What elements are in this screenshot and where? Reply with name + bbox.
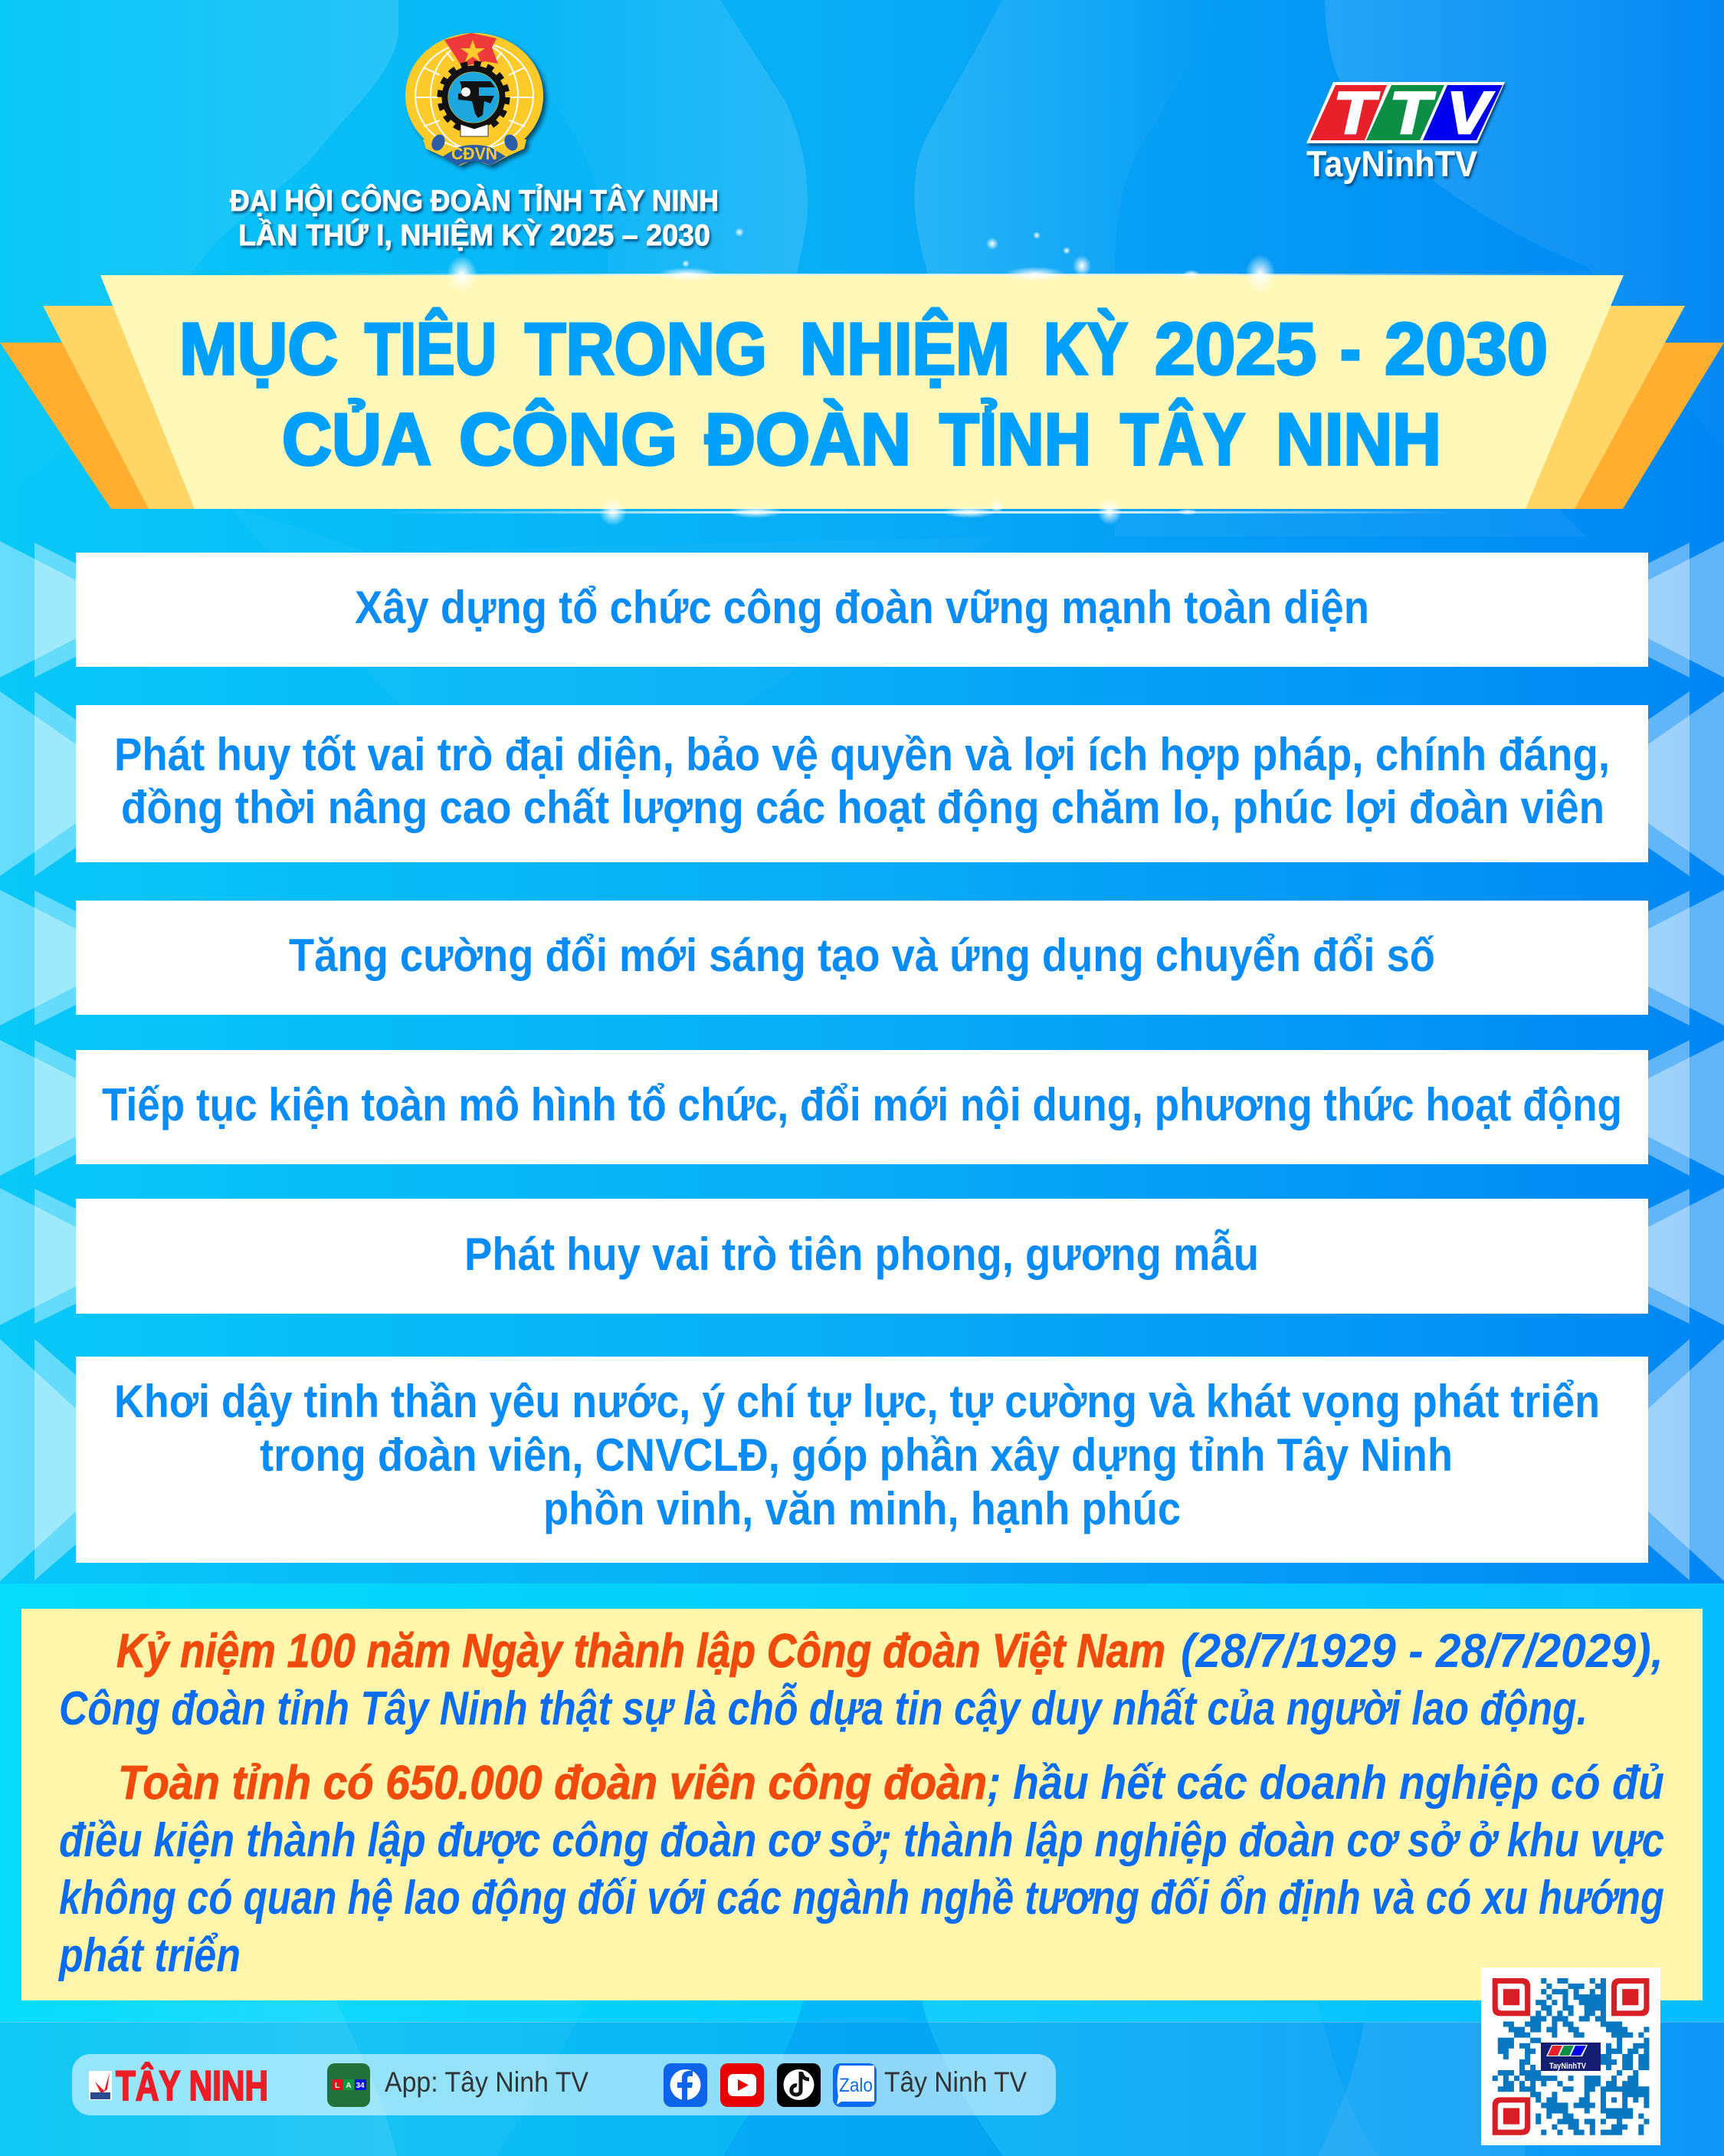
left side chevron panels xyxy=(0,541,76,1581)
goal 1 xyxy=(76,553,1648,667)
icon: app: 34 xyxy=(356,2082,365,2090)
banner title text: TÂY xyxy=(1120,398,1245,481)
goal 6: Khơi dậy tinh thần yêu nước, ý chí tự lực, tự cường và khát vọng phát triển xyxy=(114,1376,1600,1427)
banner title text: CÔNG xyxy=(459,398,677,481)
heading: congress name: ĐẠI HỘI CÔNG ĐOÀN TỈNH TÂY NINH xyxy=(230,183,719,218)
banner title text: 2025 xyxy=(1155,308,1316,390)
icon: TTV logo: T xyxy=(1333,79,1380,146)
title banner xyxy=(0,275,1724,509)
QR centre logo: TayNinhTV xyxy=(1549,2062,1587,2071)
icon: Tây Ninh newspaper logo: TÂY NINH xyxy=(116,2062,268,2109)
icon: Tây Ninh newspaper logo xyxy=(89,2062,268,2109)
icon: app xyxy=(327,2063,370,2107)
goal 5: Phát huy vai trò tiên phong, gương mẫu xyxy=(464,1229,1259,1280)
icon: facebook xyxy=(664,2063,707,2107)
banner title text xyxy=(179,307,1548,481)
QR code xyxy=(1481,1967,1660,2145)
sparkles on banner edges xyxy=(230,228,1609,526)
banner title text: TIÊU xyxy=(365,307,497,390)
icon: TTV logo: TayNinhTV xyxy=(1306,143,1478,184)
icon: app: L xyxy=(335,2082,339,2090)
QR centre logo xyxy=(1541,2043,1601,2071)
icon: TTV logo xyxy=(1306,79,1505,184)
goal 5 xyxy=(76,1199,1648,1314)
goal 6 xyxy=(76,1357,1648,1563)
heading: congress name xyxy=(230,183,719,252)
banner title text: KỲ xyxy=(1044,308,1128,390)
panel: commemoration text: phát triển xyxy=(57,1929,241,1982)
banner title text: NHIỆM xyxy=(800,307,1010,390)
icon: TTV logo: T xyxy=(1389,79,1436,146)
icon: trade union emblem: CĐVN xyxy=(451,144,497,163)
banner title text: MỤC xyxy=(179,308,338,390)
banner title text: - xyxy=(1340,308,1361,390)
background xyxy=(0,0,1724,1583)
goal 2: Phát huy tốt vai trò đại diện, bảo vệ quyền và lợi ích hợp pháp, chính đáng, xyxy=(114,729,1610,780)
goal 3 xyxy=(76,901,1648,1015)
flag xyxy=(444,33,498,67)
icon: youtube xyxy=(720,2063,764,2107)
goal 2: đồng thời nâng cao chất lượng các hoạt động chăm lo, phúc lợi đoàn viên xyxy=(121,782,1604,833)
icon: tiktok xyxy=(777,2063,821,2107)
icon: zalo: Zalo xyxy=(839,2075,873,2096)
banner title text: TRONG xyxy=(525,308,767,390)
panel: commemoration text: Toàn tỉnh có 650.000 đoàn viên công đoàn xyxy=(118,1757,987,1810)
right side chevron panels xyxy=(1648,541,1724,1581)
bottom background strip xyxy=(0,1583,1724,2156)
icon: trade union emblem xyxy=(405,33,543,166)
goal 2 xyxy=(76,705,1648,862)
panel: commemoration text: ; hầu hết các doanh nghiệp có đủ xyxy=(987,1757,1664,1810)
panel: commemoration text: (28/7/1929 - 28/7/2029), xyxy=(1181,1625,1663,1678)
icon: zalo xyxy=(833,2063,877,2107)
goal 6: trong đoàn viên, CNVCLĐ, góp phần xây dựng tỉnh Tây Ninh xyxy=(260,1429,1453,1481)
banner title text: TỈNH xyxy=(939,398,1091,481)
panel: commemoration text xyxy=(21,1609,1703,2000)
banner title text: ĐOÀN xyxy=(705,399,911,481)
footer bar xyxy=(72,2054,1056,2115)
goal 4 xyxy=(76,1050,1648,1164)
social label: Tây Ninh TV xyxy=(884,2066,1027,2098)
icon: app: A xyxy=(346,2082,352,2090)
heading: congress name: LẦN THỨ I, NHIỆM KỲ 2025 – 2030 xyxy=(238,218,710,252)
banner title text: 2030 xyxy=(1385,308,1548,390)
banner title text: NINH xyxy=(1276,399,1441,481)
goal 1: Xây dựng tổ chức công đoàn vững mạnh toàn diện xyxy=(355,582,1369,633)
goal 6: phồn vinh, văn minh, hạnh phúc xyxy=(543,1483,1181,1534)
banner title text: CỦA xyxy=(282,398,431,481)
panel: commemoration text: Kỷ niệm 100 năm Ngày thành lập Công đoàn Việt Nam xyxy=(116,1625,1165,1678)
app label: App: Tây Ninh TV xyxy=(385,2066,588,2098)
goal 3: Tăng cường đổi mới sáng tạo và ứng dụng chuyển đổi số xyxy=(289,930,1435,981)
icon: TTV logo: V xyxy=(1447,79,1494,146)
